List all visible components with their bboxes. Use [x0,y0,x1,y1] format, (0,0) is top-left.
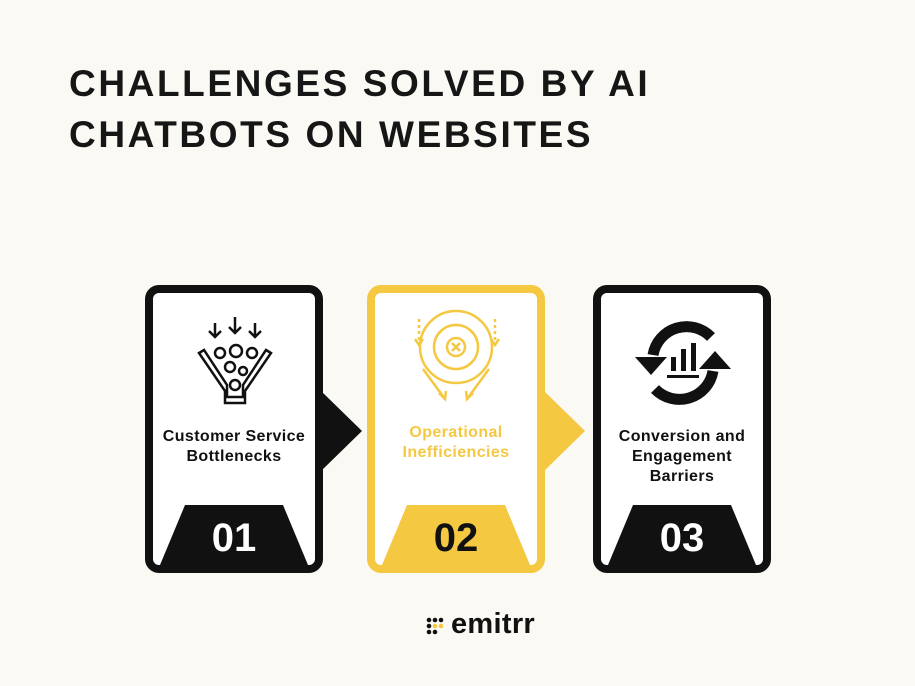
logo [426,608,535,640]
logo text: emitrr [451,608,535,640]
arrow 1 [323,393,362,469]
label [163,428,305,465]
number 02: 02 [434,516,478,560]
icon: cycle chart [635,321,731,405]
number 01: 01 [212,516,256,560]
icon: target [414,310,500,402]
card 2 [367,285,545,573]
number 02 [382,505,530,565]
label: Customer Service [163,428,305,445]
label: Conversion and [619,428,745,445]
logo mark [426,618,444,634]
label: Bottlenecks [186,448,282,465]
number 01 [160,505,308,565]
card 3 [593,285,771,573]
label: Operational [409,424,503,441]
label: Inefficiencies [402,444,509,461]
label: Engagement [632,448,732,465]
number 03 [608,505,756,565]
arrow 2 [545,392,585,470]
card 1 [145,285,323,573]
title [69,63,650,155]
number 03: 03 [660,516,704,560]
label [402,424,509,461]
title: CHATBOTS ON WEBSITES [69,114,593,155]
label [619,428,745,485]
label: Barriers [650,468,714,485]
icon: funnel [197,317,273,404]
title: CHALLENGES SOLVED BY AI [69,63,650,104]
